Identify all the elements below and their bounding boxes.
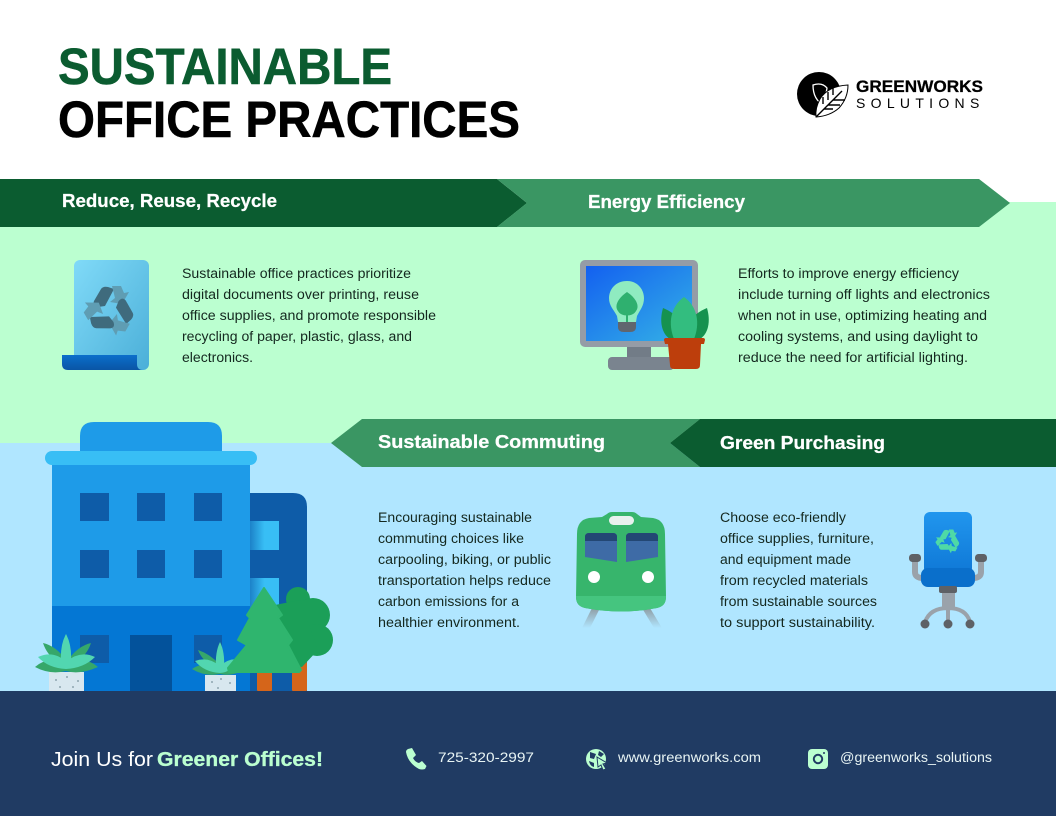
trees: [228, 587, 333, 691]
icon: recycled office chair: [909, 512, 987, 628]
text: green purchasing: from sustainable sources: [720, 594, 877, 609]
call to action: Greener Offices!: [157, 749, 323, 771]
text: sustainable commuting: commuting choices like: [378, 531, 524, 546]
text: green purchasing: from recycled materials: [720, 573, 868, 588]
banner: Reduce, Reuse, Recycle: Reduce, Reuse, Recycle: [62, 191, 277, 211]
illustration: office building with trees: [35, 422, 333, 691]
logo: GREENWORKS: [856, 77, 983, 96]
plant: left: [35, 634, 98, 691]
logo: SOLUTIONS: [856, 95, 985, 111]
contact: website: [586, 749, 761, 770]
banner: Reduce, Reuse, Recycle: [0, 179, 527, 227]
text: green purchasing: and equipment made: [720, 552, 851, 567]
banner: Energy Efficiency: Energy Efficiency: [588, 192, 745, 212]
text: reduce reuse recycle: [182, 266, 436, 365]
icon: leaf logo: [797, 72, 848, 117]
contact: phone: 725-320-2997: [438, 750, 534, 765]
contact: instagram: [808, 749, 992, 769]
title: [58, 38, 520, 148]
banner: Energy Efficiency: [497, 179, 1010, 227]
text: reduce reuse recycle: office supplies, and promote responsible: [182, 308, 436, 323]
text: energy efficiency: cooling systems, and using daylight to: [738, 329, 978, 344]
panel: footer: [0, 691, 1056, 816]
text: energy efficiency: Efforts to improve energy efficiency: [738, 266, 959, 281]
text: green purchasing: office supplies, furniture,: [720, 531, 874, 546]
plant: right: [192, 642, 246, 691]
icon: recycling document: [62, 260, 149, 370]
banner: Green Purchasing: Green Purchasing: [720, 433, 885, 453]
call to action: [51, 749, 323, 771]
text: sustainable commuting: Encouraging sustainable: [378, 510, 532, 525]
text: green purchasing: [720, 510, 877, 630]
contact: website: www.greenworks.com: [617, 750, 761, 765]
icon: monitor with bulb and plant: [580, 260, 709, 370]
banner: Green Purchasing: [670, 419, 1056, 467]
contact: phone: [406, 748, 534, 770]
contact: instagram: @greenworks_solutions: [840, 750, 992, 765]
text: sustainable commuting: transportation helps reduce: [378, 573, 551, 588]
text: sustainable commuting: healthier environment.: [378, 615, 520, 630]
banner: Sustainable Commuting: [331, 419, 700, 467]
text: reduce reuse recycle: digital documents over printing, reuse: [182, 287, 419, 302]
text: energy efficiency: reduce the need for artificial lighting.: [738, 350, 968, 365]
banner: Sustainable Commuting: Sustainable Commuting: [378, 432, 605, 452]
text: energy efficiency: [737, 266, 990, 365]
title: SUSTAINABLE: [58, 38, 392, 95]
text: energy efficiency: include turning off lights and electronics: [738, 287, 990, 302]
text: energy efficiency: when not in use, optimizing heating and: [737, 308, 987, 323]
icon: train: [576, 512, 666, 628]
call to action: Join Us for: [51, 749, 153, 771]
text: green purchasing: to support sustainability.: [720, 615, 875, 630]
text: green purchasing: Choose eco-friendly: [720, 510, 846, 525]
text: sustainable commuting: [378, 510, 551, 630]
text: sustainable commuting: carpooling, biking, or public: [378, 552, 551, 567]
title: OFFICE PRACTICES: [58, 91, 520, 148]
text: sustainable commuting: carbon emissions for a: [378, 594, 520, 609]
text: reduce reuse recycle: recycling of paper, plastic, glass, and: [182, 329, 412, 344]
text: reduce reuse recycle: electronics.: [182, 350, 253, 365]
logo: [797, 72, 985, 117]
text: reduce reuse recycle: Sustainable office practices prioritize: [182, 266, 411, 281]
